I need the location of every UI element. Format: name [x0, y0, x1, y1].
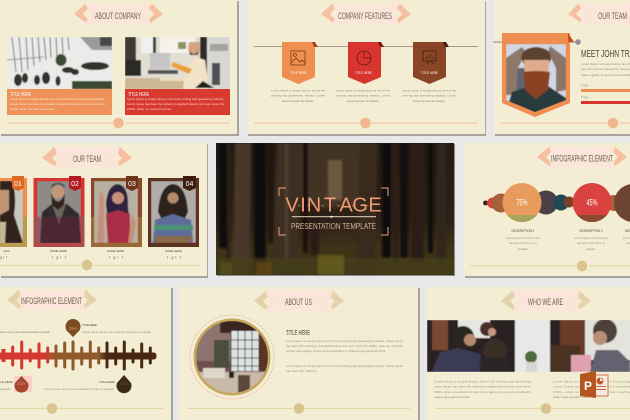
forest	[216, 143, 454, 275]
team text: Lorem Ipsum is simply dummy text of the printing	[553, 380, 630, 384]
panel: about us	[179, 287, 420, 420]
panel: cover	[216, 143, 455, 276]
caption: title here orange: Lorem Ipsum is simply dummy text of the printing and typesetting industry.	[10, 97, 105, 101]
team text: Lorem Ipsum has been the industry's standard dummy text ever since	[434, 384, 532, 388]
footer divider	[0, 260, 200, 270]
footer divider	[0, 403, 164, 414]
ribbon: infographic element	[7, 289, 97, 311]
subtitle: PRESENTATION TEMPLATE	[291, 221, 376, 231]
card 04	[148, 176, 199, 247]
descriptions: DESCRIPTION 2	[580, 229, 603, 233]
descriptions: sample Contrary to	[577, 241, 606, 245]
about heading: TITLE HERE	[286, 330, 310, 337]
ribbon: infographic element: INFOGRAPHIC ELEMENT	[21, 296, 82, 306]
wave labels: LE HERE	[0, 380, 13, 384]
feature descriptions: Ipsum has been the industry.	[413, 99, 445, 103]
card 01	[0, 176, 27, 247]
feature descriptions: printing and typesetting industry. Lorem	[336, 94, 391, 98]
team text	[434, 380, 630, 399]
about text: printer took a galley of type and scrambled it to make a type specimen book.	[286, 349, 386, 353]
panel: about company	[0, 0, 239, 136]
flag: image	[282, 42, 318, 84]
footer divider	[7, 118, 230, 128]
caption: title here red: Lorem Ipsum has been the industry's standard dummy text ever since the	[127, 102, 224, 106]
profile text	[581, 62, 630, 77]
team text: Lorem Ipsum has been the industry's standard	[553, 384, 630, 388]
ribbon: infographic element	[537, 146, 627, 168]
names and social: g+ f	[0, 256, 7, 260]
wave labels: Ipsum dummy text sample Contrary to popular	[0, 330, 50, 334]
wave labels: Lorem Ipsum dummy text sample Contrary to popular	[82, 330, 151, 334]
profile text: the printing and typesetting industry	[581, 67, 630, 71]
feature descriptions: Lorem Ipsum is simply dummy text of the	[336, 88, 390, 92]
pin: bottom dark	[116, 375, 132, 393]
card 03	[91, 176, 142, 247]
dashed ring	[190, 315, 274, 399]
icon: picture	[291, 51, 305, 65]
caption: title here red: 1500s, when an unknown printer.	[127, 107, 172, 111]
title: vintage: -	[366, 200, 369, 210]
names and social: NAME HERE	[165, 249, 182, 253]
card 02	[34, 176, 84, 247]
feature descriptions	[271, 88, 457, 103]
title: vintage: A	[339, 194, 353, 216]
title: vintage: G	[352, 194, 368, 216]
title: vintage: V	[285, 194, 299, 216]
skill bars	[581, 84, 630, 104]
wave labels: Lorem Ipsum dummy text sample Contrary to popular	[44, 387, 114, 391]
ribbon: who we are	[501, 289, 591, 312]
footer divider	[187, 403, 410, 414]
ribbon: company features: COMPANY FEATURES	[338, 11, 392, 21]
about text: Lorem Ipsum is simply dummy text of the printing and typesetting industry. Lorem Ipsum	[286, 339, 404, 343]
title: vintage: I	[300, 194, 306, 216]
panel: infographic wave	[0, 287, 173, 420]
card 02: 02	[71, 181, 79, 188]
ribbon: about company: ABOUT COMPANY	[95, 11, 141, 21]
about text: has been the industry's standard dummy text ever since the 1500s, when an unknown	[286, 344, 404, 348]
descriptions: Lorem Ipsum dummy text	[506, 236, 540, 240]
names and social: t g+ f	[109, 256, 123, 260]
title: vintage: N	[307, 194, 321, 216]
circle chain: 45%	[586, 198, 598, 208]
panel: company features	[247, 0, 486, 136]
footer divider	[254, 118, 478, 128]
team text: Lorem Ipsum is simply dummy text of the printing and typesetting	[434, 380, 532, 384]
descriptions: popular.	[518, 247, 528, 251]
photo: office man	[125, 37, 230, 89]
title: vintage: -	[321, 200, 324, 210]
feature descriptions: Lorem Ipsum is simply dummy text of the	[271, 88, 326, 92]
caption: title here red: TITLE HERE	[128, 92, 149, 98]
caption: title here orange: 1500s, when an unknown printer.	[10, 107, 55, 111]
wave labels: TITLE HERE	[82, 323, 97, 327]
icon: pie	[357, 51, 371, 65]
axis line	[130, 354, 157, 355]
names and social: HERE	[3, 249, 10, 253]
caption: title here orange	[7, 89, 112, 115]
panel: our team profile	[493, 0, 630, 136]
ribbon: about us: ABOUT US	[285, 297, 312, 307]
timeline line	[254, 46, 478, 47]
card 04: 04	[186, 181, 193, 188]
team text: 1500s, when an unknown printer took a galley of type and scrambled it	[434, 390, 531, 394]
descriptions: DESCRIPTION 1	[512, 229, 535, 233]
footer divider	[435, 403, 630, 414]
icon: powerpoint logo: P	[584, 379, 592, 393]
flag: presentation: TITLE HERE	[421, 70, 438, 75]
profile text: make a galley of type and scrambled	[581, 73, 630, 77]
caption: title here red: Lorem Ipsum is simply dummy text of the printing and typesetting industry.	[127, 97, 224, 101]
timeline line	[493, 39, 581, 45]
waveform	[0, 340, 156, 370]
about text: Lorem Ipsum is simply dummy text of the printing and typesetting industry. Lorem Ipsum	[286, 364, 404, 368]
names and social	[0, 249, 182, 260]
ribbon: our team	[568, 3, 630, 26]
ribbon: company features	[321, 3, 411, 25]
names and social: t g+ f	[52, 256, 66, 260]
feature descriptions: printing and typesetting industry. Lorem	[402, 94, 457, 98]
ribbon: our team	[42, 146, 132, 169]
panel: infographic circles	[464, 143, 630, 278]
feature descriptions: printing and typesetting industry. Lorem	[271, 94, 326, 98]
title: vintage: -	[352, 200, 355, 210]
icon: presentation board	[423, 51, 436, 64]
photo: round room	[194, 318, 270, 396]
caption: title here red	[125, 89, 230, 115]
title: vintage: E	[368, 194, 382, 216]
profile text: Lorem Ipsum is simply dummy text of	[581, 62, 630, 66]
card 03: 03	[128, 181, 136, 188]
footer divider	[470, 261, 630, 271]
caption: title here orange: TITLE HERE	[10, 92, 31, 98]
feature descriptions: Ipsum has been the industry.	[347, 99, 379, 103]
descriptions	[506, 229, 630, 251]
caption: title here orange: Lorem Ipsum has been the industry's standard dummy text ever since the	[10, 102, 105, 106]
ribbon: who we are: WHO WE ARE	[528, 297, 563, 307]
names and social: t g+ f	[167, 256, 181, 260]
icon: powerpoint logo	[580, 371, 608, 398]
pin: bottom red: 25%	[17, 381, 26, 386]
photo: atrium	[7, 37, 112, 89]
rule	[292, 216, 376, 218]
flag: image: TITLE HERE	[290, 70, 307, 75]
descriptions: sample Contrary to	[509, 241, 538, 245]
flag: chart	[348, 42, 384, 84]
panel: who we are	[427, 287, 630, 420]
pin: top	[66, 319, 80, 337]
skill bars: TITLE	[581, 84, 589, 88]
wave labels: popular.	[0, 387, 11, 391]
footer divider	[501, 118, 630, 128]
flag: presentation	[413, 42, 449, 84]
descriptions: Lorem Ipsum dummy text	[574, 236, 608, 240]
feature descriptions: Ipsum has been the industry.	[282, 99, 314, 103]
team text: make a type specimen book.	[553, 395, 589, 399]
title: vintage: -	[307, 200, 310, 210]
ribbon: about us	[254, 289, 344, 312]
ribbon: our team: OUR TEAM	[73, 154, 101, 164]
names and social: NAME HERE	[50, 249, 67, 253]
wave labels	[0, 323, 151, 391]
about text: has been the industry.	[286, 369, 317, 373]
title: vintage: -	[337, 200, 340, 210]
descriptions: popular.	[586, 247, 596, 251]
feature descriptions: Lorem Ipsum is simply dummy text of the	[402, 88, 456, 92]
ribbon: about company	[74, 3, 163, 25]
circle chain: 75%	[516, 198, 528, 208]
flag with portrait	[502, 33, 574, 117]
skill bars: TITLE	[581, 96, 589, 100]
team text: make a type specimen book.	[434, 395, 470, 399]
pin: top: 25%	[68, 326, 78, 331]
flag: chart: TITLE HERE	[355, 70, 372, 75]
wave labels: TITLE HERE	[99, 380, 115, 384]
about text	[286, 339, 404, 373]
title: vintage: -	[298, 200, 300, 210]
team text: 1500s, when an unknown printer took a galley	[553, 390, 630, 394]
photo: team meeting	[427, 319, 630, 372]
names and social: NAME HERE	[107, 249, 124, 253]
pin: bottom dark: 25%	[119, 381, 129, 386]
title bracket	[279, 188, 388, 235]
circle chain	[483, 183, 630, 222]
card 01: 01	[14, 181, 22, 188]
title: vintage: T	[324, 194, 336, 216]
pin: bottom red	[14, 376, 32, 393]
panel: our team	[0, 143, 208, 278]
